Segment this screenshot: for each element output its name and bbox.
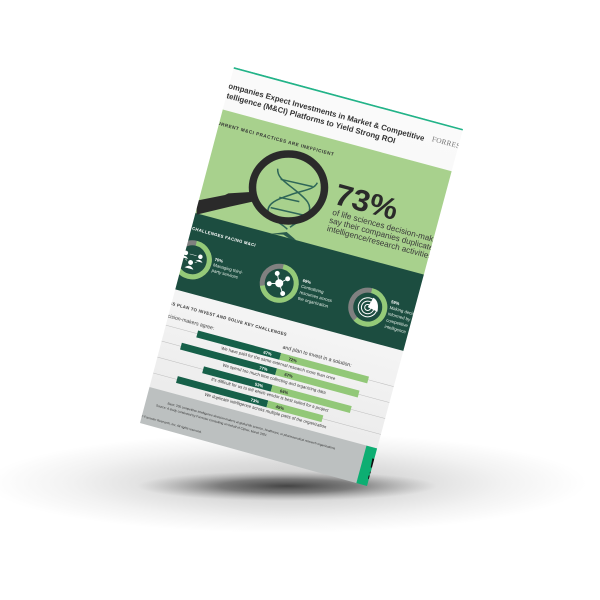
handle: [197, 192, 253, 215]
donut label: decision making: [384, 300, 414, 334]
bar row 3: 64%: [279, 388, 289, 395]
bar row 1: [196, 330, 369, 384]
icon: people: [184, 250, 203, 270]
donut label: third-party services: party services: [211, 268, 239, 280]
donut: decision making: [348, 288, 388, 327]
bar row 2: 77%: [259, 365, 268, 372]
tab logo marks: [368, 458, 374, 479]
donut label: centralizing resources: 69%: [302, 278, 312, 285]
donut label: decision making: 59%: [391, 299, 400, 306]
lens ring: [252, 154, 324, 221]
bar row 3: 53%: [254, 381, 264, 389]
challenges heading: TOP CHALLENGES FACING M&CI: [181, 223, 256, 248]
ground shadow: [0, 433, 587, 533]
donut label: centralizing resources: the organization: [297, 296, 329, 309]
bar row 1: 72%: [288, 356, 298, 363]
column label: agree: Life sciences decision-makers agree:: [131, 304, 215, 332]
bar row 2: 67%: [284, 372, 294, 379]
icon: radar: [358, 297, 378, 318]
donut label: decision making: competitive: [386, 318, 409, 328]
tilted report page: [140, 67, 463, 486]
section heading: CURRENT M&CI PRACTICES ARE INEFFICIENT: [213, 120, 335, 157]
donut label: centralizing resources: resources across: [299, 290, 333, 303]
statistic caption: say their companies duplicate: [328, 216, 435, 253]
bar row 2: [180, 342, 360, 398]
statistic caption: intelligence/research activities: [326, 224, 433, 261]
donut label: decision making: informed by: [387, 311, 412, 322]
donut label: third-party services: 70%: [214, 257, 224, 264]
title: Companies Expect Investments in Market & Competitive: [222, 80, 426, 143]
footnotes: Source: A study conducted by Forrester Consulting on behalf of Cipher, March 2021: [156, 403, 267, 437]
donut label: centralizing resources: [298, 279, 332, 308]
footnotes: © Forrester Research, Inc. All rights reserved.: [141, 414, 202, 434]
donut label: decision making: Making decisions: [389, 305, 424, 319]
magnifying glass with DNA: [197, 154, 324, 240]
bar row 2: We spend too much time collecting and organizing data: [222, 362, 327, 395]
panel: challenges: [175, 213, 424, 351]
panel: current practices: [189, 108, 463, 279]
big statistic: 73%: [331, 178, 401, 227]
bar row 3: It's difficult for us to tell which vendor is best suited for a project: [211, 376, 330, 413]
donut label: third-party services: Managing third-: [213, 262, 244, 275]
bar row 1: 67%: [263, 350, 273, 357]
statistic caption: of life sciences decision-makers: [331, 208, 445, 247]
DNA below lens: [269, 232, 296, 240]
page background: [150, 290, 403, 448]
title: Intelligence (M&CI) Platforms to Yield Strong ROI: [219, 89, 396, 145]
bar row 4: We duplicate intelligence across multiple parts of the organization: [204, 392, 328, 430]
donut label: third-party services: [211, 258, 242, 278]
DNA helix: [268, 169, 317, 229]
donut label: centralizing resources: Centralizing: [301, 284, 325, 295]
footer panel: [140, 387, 378, 486]
section heading: plan to invest: COMPANIES PLAN TO INVEST AND SOLVE KEY CHALLENGES: [148, 295, 287, 337]
donut: centralizing resources: [260, 264, 299, 303]
bar row 3: [202, 366, 352, 413]
Forrester logo: FORRESTER: [431, 134, 476, 154]
bar chart: [153, 325, 394, 434]
icon: network: [265, 270, 291, 296]
bar row 1: We have paid for the same external research more than once: [221, 346, 337, 381]
bar row 4: [174, 376, 330, 430]
column label: invest: and plan to invest in a solution:: [282, 344, 352, 369]
bar row 4: 45%: [275, 404, 285, 411]
footnotes: Base: 205 competitive intelligence decision-makers at global life science, healthcare, or pharmaceutical research organizations: [167, 401, 336, 451]
green tab: [356, 446, 378, 486]
bar row 4: 73%: [250, 397, 260, 404]
top accent line: [229, 66, 471, 133]
donut label: decision making: intelligence: [384, 324, 407, 334]
donut: third-party services: [179, 240, 212, 280]
